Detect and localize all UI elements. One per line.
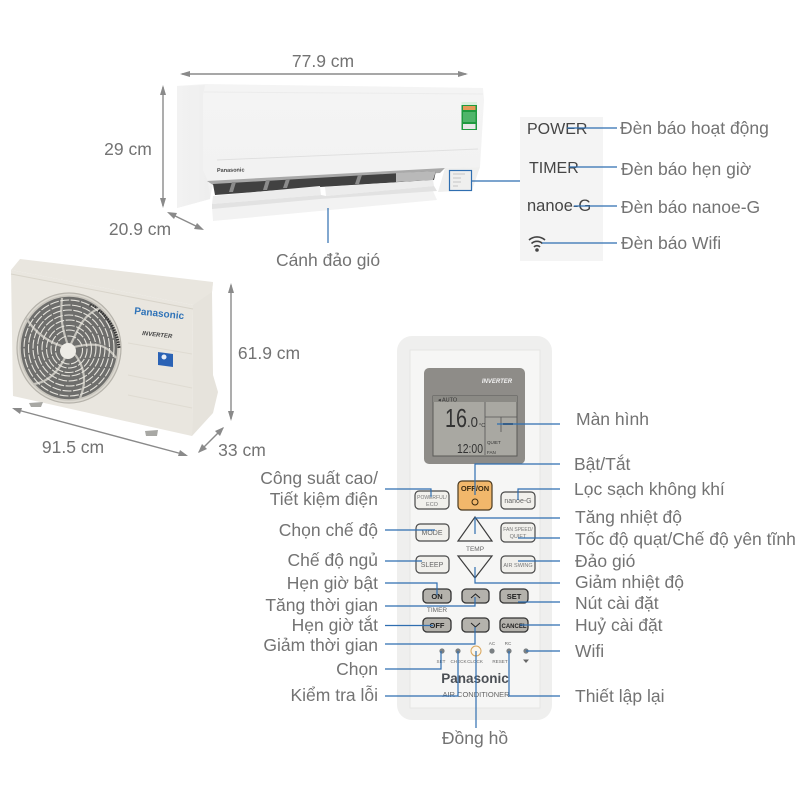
status dots and small labels: CHECK — [450, 659, 467, 664]
callout: clock: Đồng hồ — [442, 728, 508, 748]
indicator: wifi: Đèn báo Wifi — [621, 233, 721, 253]
callout: reset — [509, 651, 664, 706]
callout: timer on: Hẹn giờ bật — [287, 573, 378, 593]
indicator: nanoe-G: Đèn báo nanoe-G — [621, 197, 760, 217]
indicator: nanoe-G — [527, 197, 760, 217]
callout: error check — [290, 651, 458, 705]
button: sleep — [416, 556, 449, 573]
button: off — [423, 618, 451, 632]
callout: wifi: Wifi — [575, 641, 604, 661]
callout: power — [475, 453, 631, 495]
button: off/on — [458, 481, 492, 510]
button: on — [423, 589, 451, 603]
indicator: nanoe-G: nanoe-G — [527, 197, 591, 215]
button: temperature down — [458, 556, 492, 578]
indicator: timer: TIMER — [529, 160, 579, 177]
callout: louver: Cánh đảo gió — [276, 250, 380, 270]
fan grille — [17, 293, 121, 403]
dimension: indoor depth — [109, 212, 204, 239]
callout: sleep: Chế độ ngủ — [288, 550, 378, 570]
callout: error check: Kiểm tra lỗi — [290, 684, 378, 705]
callout: temp up: Tăng nhiệt độ — [575, 507, 682, 527]
button: fan speed: QUIET — [510, 534, 527, 540]
button: air swing: AIR SWING — [503, 563, 533, 569]
callout: temp up — [475, 507, 682, 534]
callout: temp down — [475, 567, 684, 592]
brand label: outdoor unit: Panasonic — [134, 306, 185, 322]
indicator: timer: Đèn báo hẹn giờ — [621, 159, 751, 179]
callout: swing: Đảo gió — [575, 551, 635, 571]
status dots and small labels — [437, 641, 529, 664]
label: timer: TIMER — [427, 607, 447, 614]
energy label sticker — [462, 102, 477, 130]
button: on: ON — [431, 592, 443, 601]
dimension: indoor width: 77.9 cm — [292, 51, 354, 71]
callout: timer on — [287, 573, 437, 595]
dimension: outdoor depth: 33 cm — [218, 440, 266, 460]
dimension: outdoor width — [12, 408, 188, 457]
dimension: outdoor depth — [198, 427, 266, 460]
button: powerful/eco: POWERFUL/ — [417, 495, 447, 501]
callout: swing — [518, 551, 635, 571]
button: mode: MODE — [422, 530, 443, 537]
callout: cancel: Huỷ cài đặt — [575, 615, 663, 635]
callout: high power / eco: Công suất cao/ — [260, 468, 378, 488]
callout: high power / eco: Tiết kiệm điện — [270, 489, 378, 509]
callout: time up — [265, 595, 475, 615]
button: nanoe-G — [501, 492, 535, 509]
dimension: outdoor height: 61.9 cm — [238, 343, 300, 363]
badge — [158, 352, 173, 367]
button: time down — [462, 618, 489, 632]
status dots and small labels: CLOCK — [467, 659, 484, 664]
dimension: outdoor width: 91.5 cm — [42, 437, 104, 457]
button: powerful/eco: ECO — [426, 502, 439, 508]
inverter logo: INVERTER — [142, 331, 173, 340]
button: fan speed: FAN SPEED/ — [503, 527, 533, 533]
remote screen: °C — [479, 423, 485, 429]
button: powerful/eco — [415, 491, 449, 509]
status dots and small labels: SET — [437, 659, 446, 664]
label: temp: TEMP — [466, 546, 484, 553]
callout: set: Nút cài đặt — [575, 593, 659, 613]
dimension: indoor width — [180, 51, 468, 77]
dimension: indoor height — [104, 85, 166, 208]
button: air swing — [501, 556, 535, 573]
button: off: OFF — [430, 621, 445, 630]
indoor unit — [177, 84, 484, 221]
remote screen: INVERTER — [482, 379, 513, 385]
dimension: indoor height: 29 cm — [104, 139, 152, 159]
outdoor unit — [11, 259, 218, 436]
callout: select — [336, 651, 441, 679]
callout: air purify: Lọc sạch không khí — [574, 479, 725, 499]
button: sleep: SLEEP — [421, 562, 444, 569]
outdoor feet — [29, 402, 158, 436]
remote screen: 12:00 — [457, 441, 483, 456]
button: time up — [462, 589, 489, 603]
button: temperature up — [458, 517, 492, 541]
dimension: indoor depth: 20.9 cm — [109, 219, 171, 239]
callout: fan speed: Tốc độ quạt/Chế độ yên tĩnh — [575, 529, 796, 549]
callout: high power / eco — [260, 468, 431, 509]
callout: time down: Giảm thời gian — [263, 635, 378, 655]
button: set: SET — [507, 592, 522, 601]
button: fan speed — [501, 523, 535, 542]
callout: reset: Thiết lập lại — [575, 686, 664, 706]
panel: indicator lights — [472, 117, 769, 261]
button: nanoe-G: nanoe-G — [504, 498, 532, 505]
status dots and small labels: RESET — [492, 659, 508, 664]
remote screen: FAN — [487, 450, 496, 455]
brand label: indoor unit: Panasonic — [217, 168, 245, 174]
indicator: power — [527, 118, 769, 138]
remote brand: Panasonic — [441, 671, 509, 686]
remote screen: 16 — [445, 403, 467, 433]
remote screen: ◂ AUTO — [438, 398, 458, 404]
remote subtitle: AIR CONDITIONER — [442, 690, 510, 699]
callout: temp down: Giảm nhiệt độ — [575, 572, 684, 592]
status dots and small labels: RC — [505, 641, 512, 646]
indicator: wifi — [529, 233, 721, 253]
callout: power: Bật/Tắt — [574, 453, 631, 474]
callout: sleep — [288, 550, 422, 570]
callout: time down — [263, 627, 475, 655]
indicator highlight box — [450, 170, 472, 190]
callout: select: Chọn — [336, 659, 378, 679]
callout: air purify — [518, 479, 725, 500]
status dots and small labels: AC — [489, 641, 496, 646]
button: mode — [416, 524, 449, 541]
callout: screen: Màn hình — [576, 409, 649, 429]
button: off/on: OFF/ON — [461, 484, 489, 493]
button: cancel: CANCEL — [502, 624, 527, 630]
indicator: power: POWER — [527, 121, 587, 138]
remote screen: QUIET — [487, 440, 501, 445]
indicator: timer — [529, 159, 751, 179]
remote screen: .0 — [467, 414, 478, 431]
button: set — [500, 589, 528, 603]
remote control — [397, 336, 552, 720]
callout: louver — [276, 208, 380, 270]
remote screen — [424, 368, 525, 464]
callout: wifi — [526, 641, 604, 661]
callout: mode: Chọn chế độ — [279, 520, 378, 540]
callout: clock — [442, 651, 508, 748]
button: cancel — [500, 618, 528, 632]
indicator: power: Đèn báo hoạt động — [620, 118, 769, 138]
callout: time up: Tăng thời gian — [265, 595, 378, 615]
dimension: outdoor height — [228, 283, 300, 421]
callout: timer off: Hẹn giờ tắt — [292, 614, 378, 635]
